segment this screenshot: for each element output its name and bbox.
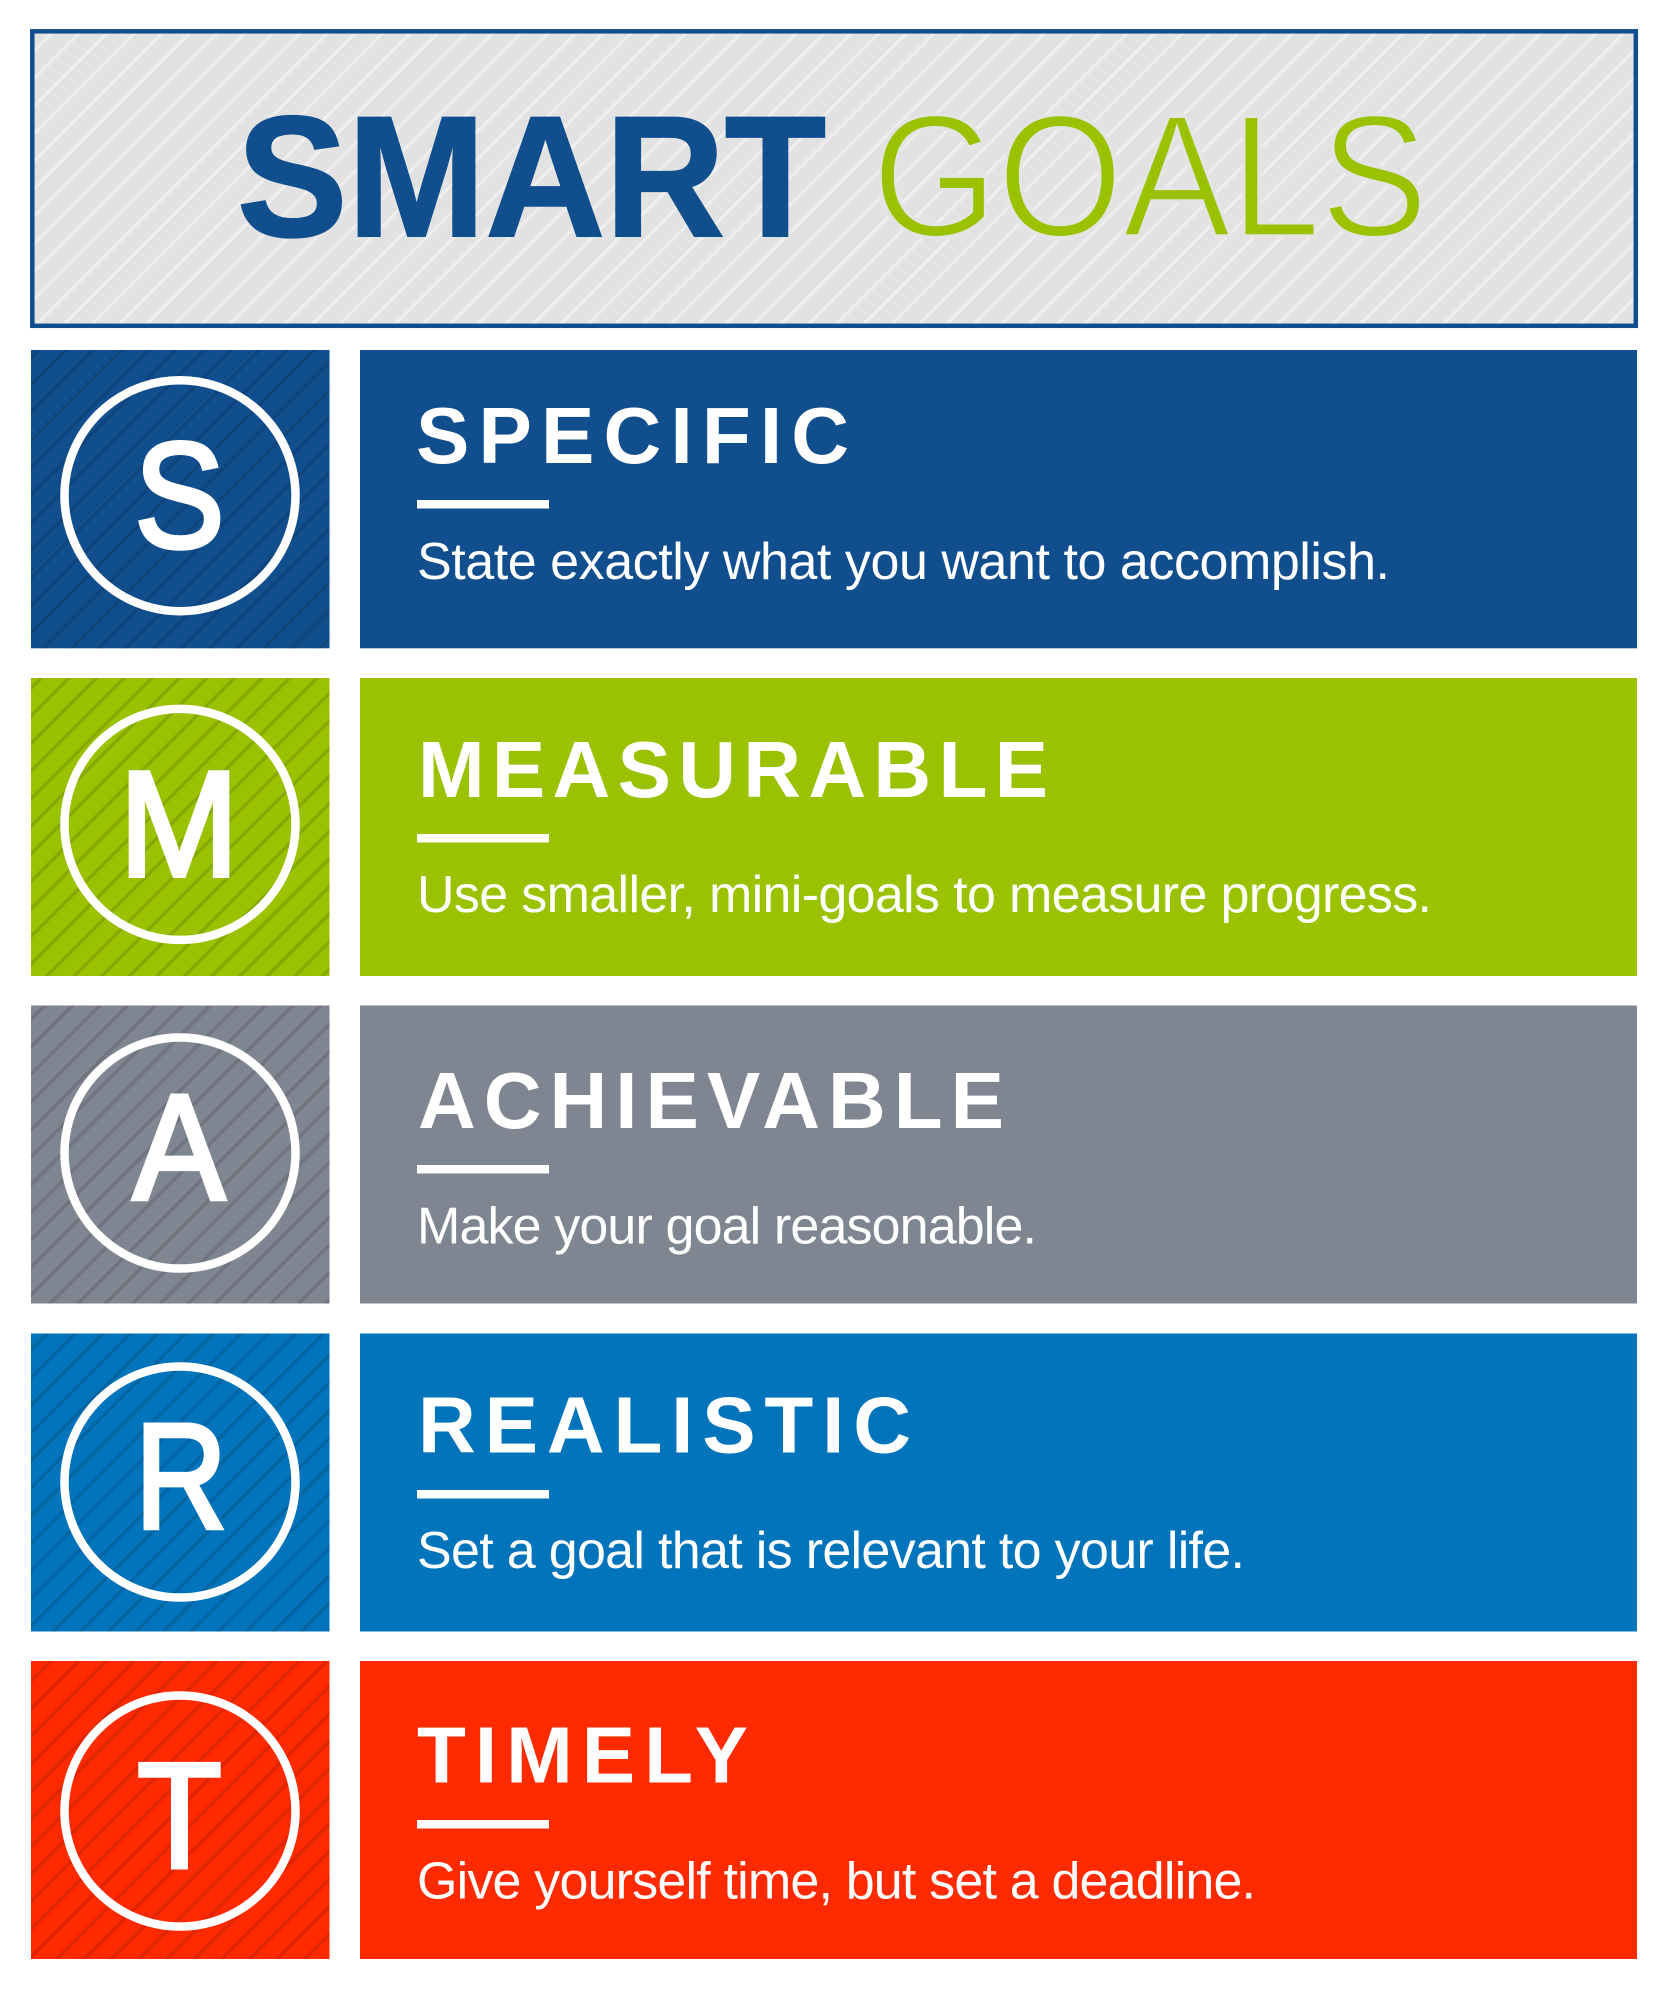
letter tile: A — [31, 1006, 330, 1304]
panel: Timely — [360, 1661, 1637, 1959]
panel: Timely: Give yourself time, but set a deadline. — [417, 1853, 1256, 1911]
letter tile: M — [31, 678, 330, 976]
letter tile: T — [31, 1661, 330, 1959]
row: Timely — [31, 1661, 1637, 1959]
title: GOALS: GOALS — [872, 78, 1428, 273]
row: Measurable — [31, 678, 1637, 976]
panel: Realistic — [360, 1334, 1637, 1632]
letter tile: R — [31, 1334, 330, 1632]
letter tile: S — [31, 350, 330, 648]
row: Specific — [31, 350, 1637, 648]
title banner — [32, 31, 1636, 326]
letter tile: S: S — [134, 411, 224, 579]
letter tile: A: A — [133, 1063, 225, 1231]
row: Realistic — [31, 1334, 1637, 1632]
panel: Achievable: ACHIEVABLE — [418, 1056, 1004, 1145]
panel: Specific: State exactly what you want to accomplish. — [417, 533, 1390, 591]
panel: Specific — [360, 350, 1637, 648]
panel: Measurable: Use smaller, mini-goals to measure progress. — [417, 866, 1432, 924]
panel: Measurable: MEASURABLE — [418, 725, 1048, 814]
letter tile: R: R — [135, 1392, 227, 1560]
panel: Realistic: REALISTIC — [418, 1381, 911, 1470]
letter tile: T: T — [137, 1731, 222, 1899]
row: Achievable — [31, 1006, 1637, 1304]
letter tile: M: M — [119, 740, 239, 908]
panel: Realistic: Set a goal that is relevant to your life. — [417, 1522, 1245, 1580]
panel: Timely: TIMELY — [417, 1711, 748, 1800]
panel: Achievable — [360, 1006, 1637, 1304]
panel: Achievable: Make your goal reasonable. — [417, 1197, 1037, 1255]
panel: Specific: SPECIFIC — [416, 391, 849, 480]
panel: Measurable — [360, 678, 1637, 976]
title: SMART: SMART — [237, 81, 826, 273]
